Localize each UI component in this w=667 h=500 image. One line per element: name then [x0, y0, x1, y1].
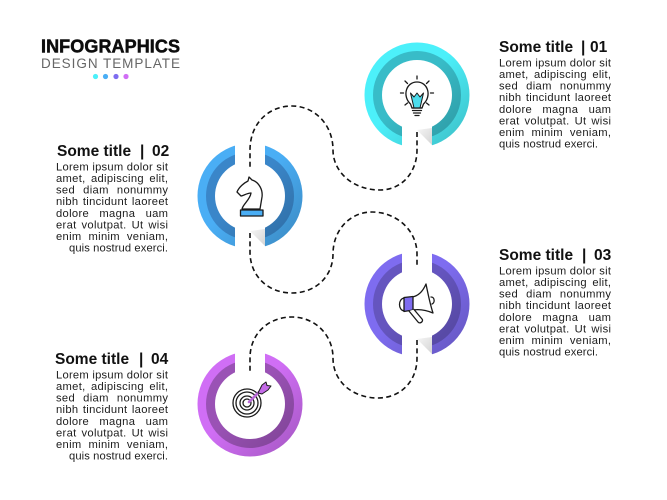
- body 02: dolore magna uam: [56, 208, 168, 220]
- ring 4: [198, 348, 302, 456]
- body 02: Lorem ipsum dolor sit: [56, 161, 169, 173]
- title block: [41, 36, 180, 79]
- body 01: Lorem ipsum dolor sit: [499, 57, 612, 69]
- body 03: amet, adipiscing elit,: [499, 277, 611, 289]
- body 04: dolore magna uam: [56, 416, 168, 428]
- body 01: [499, 57, 612, 151]
- colour dots: [93, 74, 129, 79]
- body 03: nibh tincidunt laoreet: [499, 300, 612, 312]
- body 03: quis nostrud exerci.: [499, 347, 598, 359]
- body 01: amet, adipiscing elit,: [499, 69, 611, 81]
- icon: chess knight: [237, 177, 263, 216]
- text block: 03: [499, 247, 612, 359]
- heading 01: Some title: [499, 39, 573, 56]
- body 03: enim minim veniam,: [499, 335, 611, 347]
- heading 04: 04: [151, 351, 169, 368]
- subtitle: DESIGN TEMPLATE: [41, 56, 180, 71]
- heading 03: 03: [594, 247, 612, 264]
- ring 1: [364, 42, 470, 150]
- body 03: dolore magna uam: [499, 312, 611, 324]
- body 03: erat volutpat. Ut wisi: [499, 323, 611, 335]
- body 02: nibh tincidunt laoreet: [56, 196, 169, 208]
- body 02: erat volutpat. Ut wisi: [56, 219, 168, 231]
- text block: 02: [56, 143, 169, 255]
- body 01: dolore magna uam: [499, 104, 611, 116]
- body 01: enim minim veniam,: [499, 127, 611, 139]
- ring 3: [364, 248, 470, 359]
- icon: target with arrow: [233, 382, 271, 417]
- heading 03: Some title: [499, 247, 573, 264]
- title: INFOGRAPHICS: [41, 36, 180, 56]
- ring 2: [198, 140, 302, 251]
- body 02: quis nostrud exerci.: [69, 243, 168, 255]
- body 04: amet, adipiscing elit,: [56, 381, 168, 393]
- body 03: sed diam nonummy: [499, 289, 611, 301]
- body 03: [499, 265, 612, 359]
- heading 01: 01: [590, 39, 608, 56]
- body 04: enim minim veniam,: [56, 439, 168, 451]
- body 04: quis nostrud exerci.: [69, 451, 168, 463]
- text block: 01: [499, 39, 612, 151]
- body 04: Lorem ipsum dolor sit: [56, 369, 169, 381]
- body 02: amet, adipiscing elit,: [56, 173, 168, 185]
- body 02: enim minim veniam,: [56, 231, 168, 243]
- body 04: sed diam nonummy: [56, 393, 168, 405]
- text block: 04: [55, 351, 169, 463]
- body 02: [56, 161, 169, 255]
- heading 02: Some title: [57, 143, 131, 160]
- body 04: erat volutpat. Ut wisi: [56, 427, 168, 439]
- body 01: sed diam nonummy: [499, 81, 611, 93]
- heading 04: |: [139, 351, 143, 368]
- heading 02: |: [140, 143, 144, 160]
- icon: megaphone: [400, 284, 434, 323]
- icon: light bulb: [400, 76, 434, 116]
- body 02: sed diam nonummy: [56, 185, 168, 197]
- body 03: Lorem ipsum dolor sit: [499, 265, 612, 277]
- dashed connector path: [250, 106, 417, 398]
- body 01: erat volutpat. Ut wisi: [499, 115, 611, 127]
- body 04: nibh tincidunt laoreet: [56, 404, 169, 416]
- heading 04: Some title: [55, 351, 129, 368]
- body 01: quis nostrud exerci.: [499, 139, 598, 151]
- heading 03: |: [582, 247, 586, 264]
- heading 02: 02: [152, 143, 169, 160]
- body 01: nibh tincidunt laoreet: [499, 92, 612, 104]
- heading 01: |: [581, 39, 585, 56]
- body 04: [56, 369, 169, 463]
